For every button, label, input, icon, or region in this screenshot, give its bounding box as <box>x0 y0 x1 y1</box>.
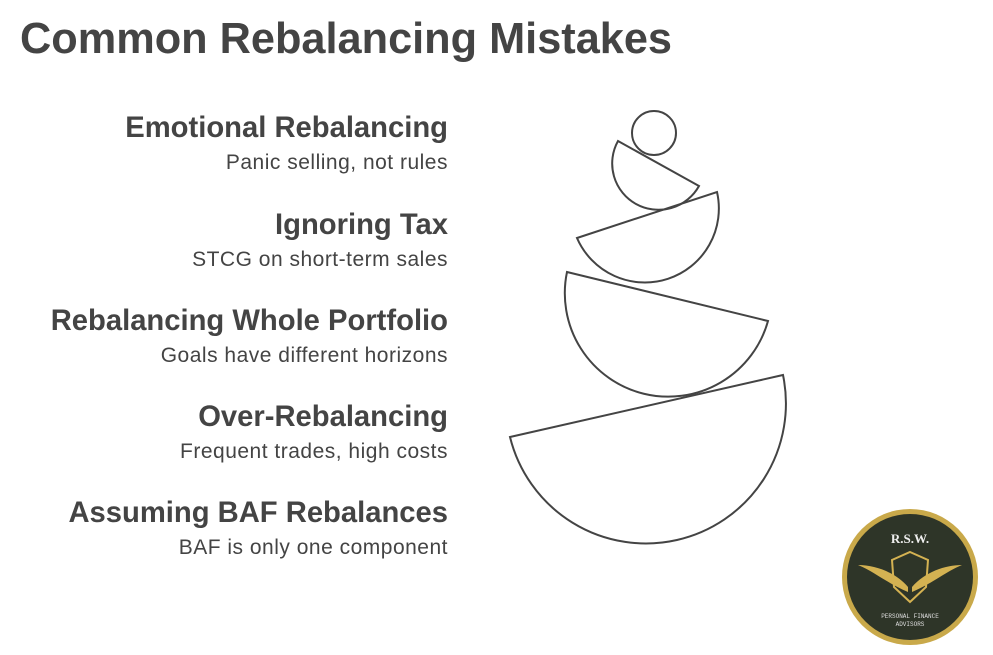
item: assuming BAF rebalances <box>68 497 448 559</box>
shape: half disc 5 <box>510 375 786 543</box>
item: assuming BAF rebalances: Assuming BAF Rebalances <box>68 497 448 529</box>
item: emotional rebalancing <box>125 112 448 174</box>
item: rebalancing whole portfolio <box>51 305 448 367</box>
shape: half disc 2 <box>612 141 699 210</box>
shape: half disc 3 <box>577 192 719 282</box>
item: rebalancing whole portfolio: Rebalancing Whole Portfolio <box>51 305 448 337</box>
item: assuming BAF rebalances: BAF is only one component <box>179 536 448 559</box>
item: emotional rebalancing: Emotional Rebalancing <box>125 112 448 144</box>
logo: RSW badge <box>842 509 978 645</box>
title: Common Rebalancing Mistakes <box>20 15 672 63</box>
item: emotional rebalancing: Panic selling, not rules <box>226 151 448 174</box>
shape: half disc 4 <box>565 272 768 397</box>
logo: RSW badge: ADVISORS <box>896 621 925 628</box>
item: rebalancing whole portfolio: Goals have different horizons <box>161 344 448 367</box>
logo: RSW badge: R.S.W. <box>891 531 929 546</box>
item: ignoring tax: STCG on short-term sales <box>192 248 448 271</box>
item: ignoring tax <box>192 209 448 271</box>
shape: circle <box>632 111 676 155</box>
item: over-rebalancing: Frequent trades, high costs <box>180 440 448 463</box>
item: over-rebalancing <box>180 401 448 463</box>
item: ignoring tax: Ignoring Tax <box>275 209 448 241</box>
item: over-rebalancing: Over-Rebalancing <box>198 401 448 433</box>
logo: RSW badge: PERSONAL FINANCE <box>881 613 939 620</box>
